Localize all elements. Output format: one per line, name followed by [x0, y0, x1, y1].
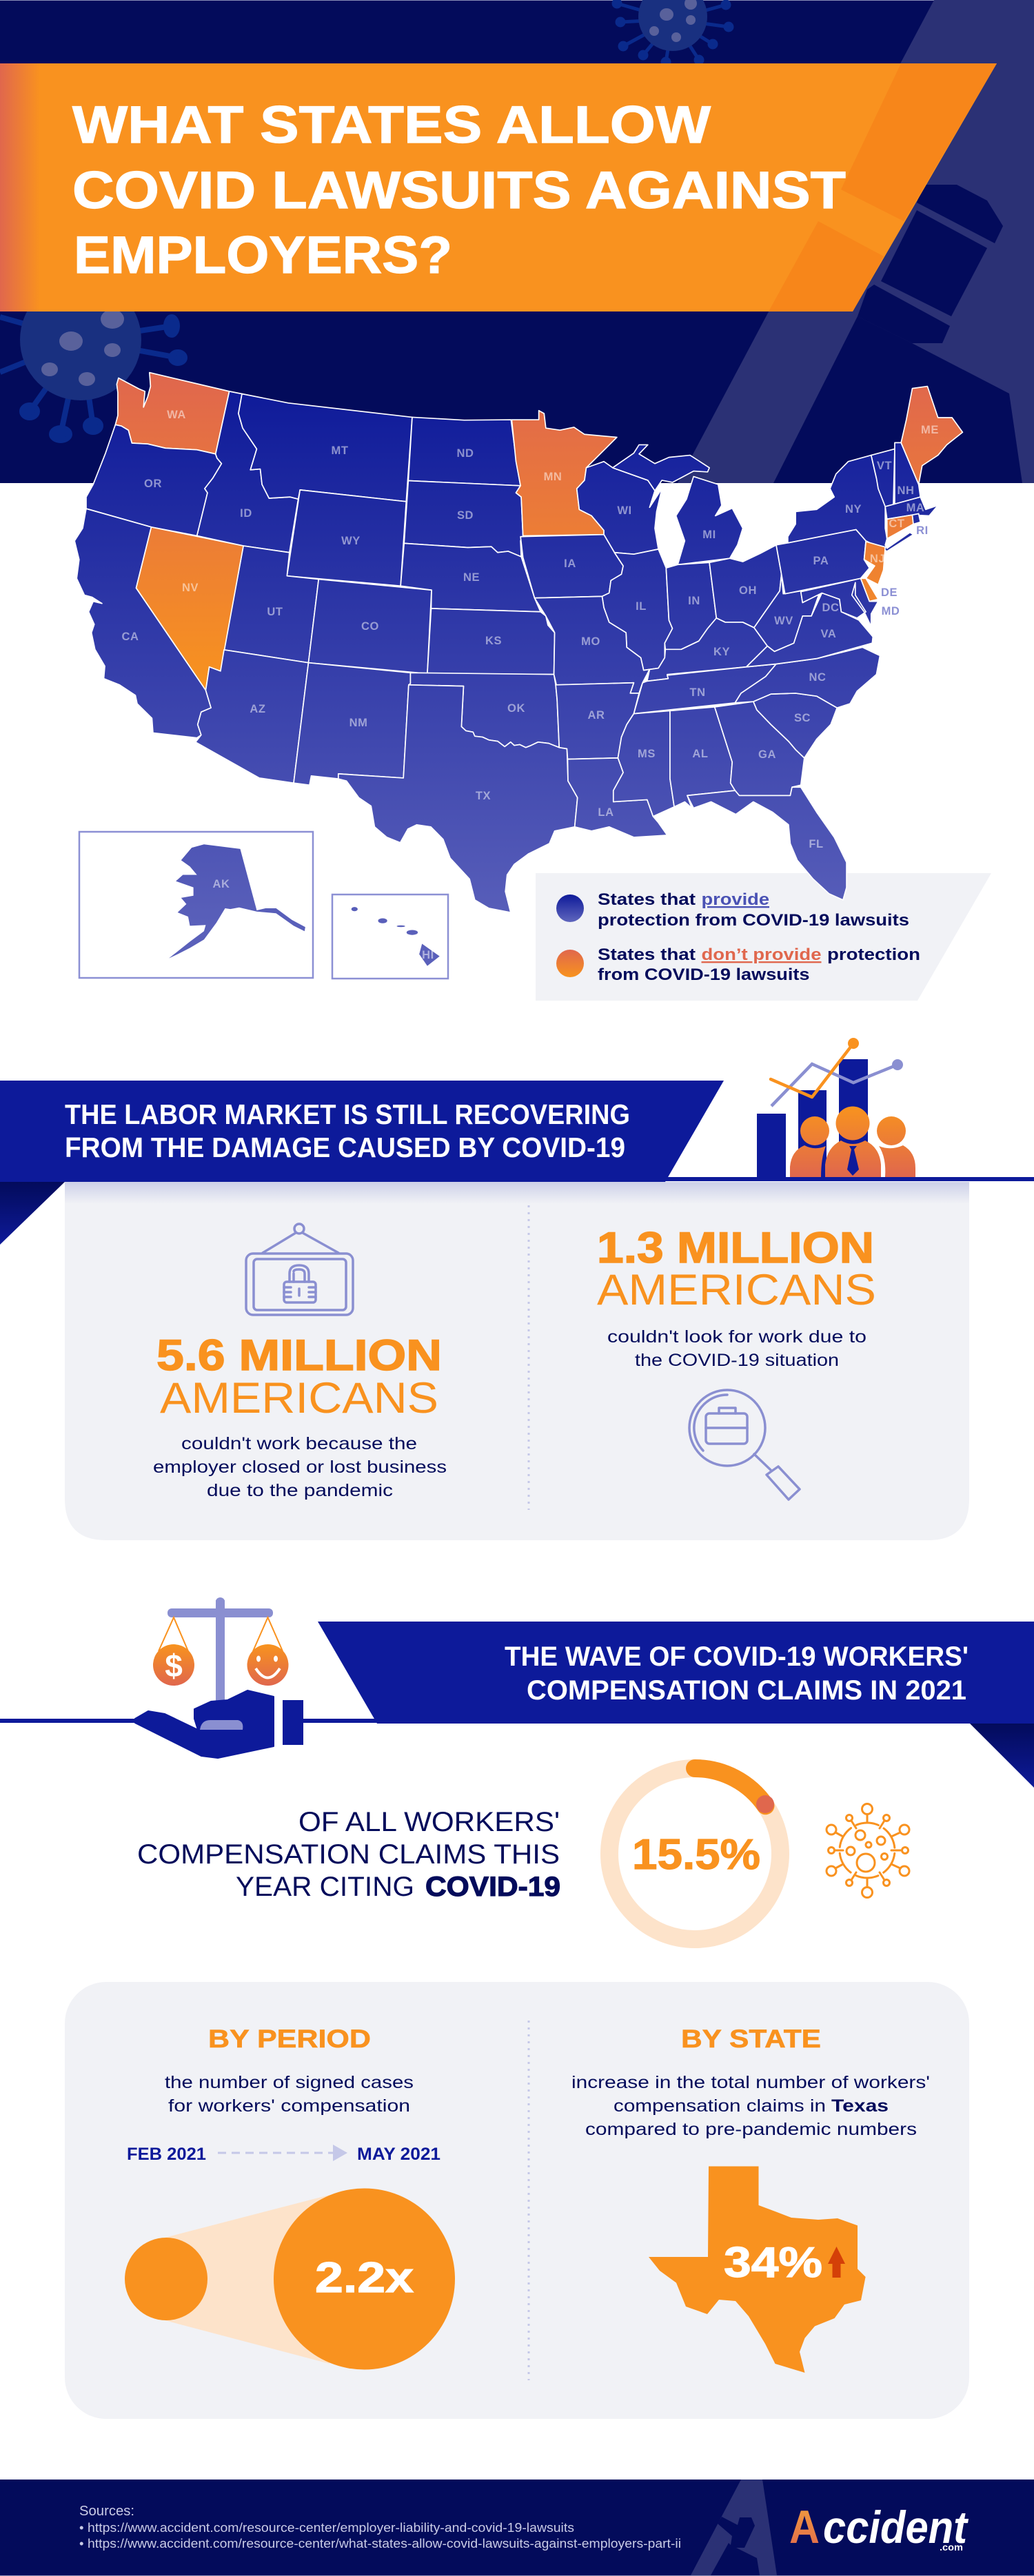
NE	[401, 543, 540, 612]
OK	[409, 673, 559, 748]
state labels: IA	[564, 558, 576, 570]
map: Texas 34%: 34%	[724, 2239, 822, 2287]
text: increase in Texas: compensation claims in	[614, 2096, 826, 2116]
state labels: NC	[809, 671, 827, 684]
UT	[224, 546, 318, 663]
section banner: compensation claims	[0, 1622, 1034, 1724]
RI	[912, 513, 920, 524]
logo: A	[789, 2501, 820, 2553]
state labels: LA	[598, 806, 614, 819]
chart: 2.2x circles	[125, 2189, 455, 2369]
text: couldn't look: the COVID-19 situation	[635, 1351, 839, 1370]
icon: closed sign with lock	[246, 1224, 353, 1315]
legend	[556, 890, 920, 984]
text: signed cases: the number of signed cases	[165, 2073, 414, 2092]
IN	[665, 562, 716, 649]
state labels: CA	[121, 631, 139, 643]
text: of all workers' claims: COMPENSATION CLAIMS THIS	[137, 1839, 560, 1870]
state labels: AZ	[250, 703, 266, 715]
MO	[535, 596, 649, 693]
state labels: WY	[341, 535, 361, 547]
WY	[287, 490, 406, 586]
AK	[169, 844, 305, 959]
section heading: labor market	[65, 1098, 630, 1163]
NH	[895, 442, 920, 504]
icon: scale held by hand	[135, 1597, 303, 1758]
MD	[801, 578, 878, 626]
GA	[715, 702, 804, 795]
state labels	[121, 409, 939, 961]
state labels: VA	[821, 628, 836, 640]
state labels: MN	[544, 471, 562, 483]
MI lower	[676, 476, 743, 564]
icon: growth chart with people	[757, 1038, 915, 1181]
state labels: TX	[476, 790, 491, 802]
title: EMPLOYERS?	[74, 226, 452, 285]
WI	[577, 462, 662, 554]
state labels: WV	[774, 615, 793, 627]
state labels: NE	[463, 571, 480, 584]
WV	[754, 574, 820, 651]
text: of all workers' claims	[137, 1807, 560, 1902]
legend text: from COVID-19 lawsuits	[598, 965, 809, 984]
state labels: MT	[331, 444, 349, 457]
footer	[0, 2480, 1034, 2576]
legend text: States that	[598, 890, 696, 909]
title: WHAT STATES ALLOW	[72, 96, 711, 154]
MS	[614, 711, 674, 817]
state labels: OR	[144, 478, 162, 490]
text: increase in Texas	[571, 2073, 930, 2139]
icon: virus top	[614, 0, 732, 65]
text: increase in Texas: compared to pre-pandemic numbers	[585, 2120, 917, 2139]
heading: by period: BY PERIOD	[208, 2025, 371, 2053]
ID	[197, 391, 298, 553]
stat: 5.6 million: AMERICANS	[160, 1374, 438, 1422]
legend text: provide	[702, 890, 769, 909]
text: of all workers' claims: YEAR CITING	[236, 1872, 414, 1902]
state labels: PA	[813, 555, 829, 567]
text: couldn't look	[607, 1327, 866, 1370]
section corner triangle left	[0, 1182, 65, 1245]
section heading: compensation claims: COMPENSATION CLAIMS IN 2021	[527, 1675, 966, 1706]
state labels: NH	[897, 484, 915, 497]
stat: 5.6 million: 5.6 MILLION	[156, 1331, 442, 1380]
stat: 5.6 million	[156, 1331, 442, 1422]
timeline: Feb 2021 to May 2021: FEB 2021	[127, 2145, 206, 2164]
icon: virus left	[0, 279, 185, 440]
MA	[885, 497, 938, 519]
state labels: GA	[758, 748, 776, 761]
stat: 1.3 million	[597, 1224, 876, 1314]
text: signed cases	[165, 2073, 414, 2116]
state labels: HI	[422, 949, 434, 961]
text: couldn't work	[153, 1434, 447, 1500]
state labels: NM	[349, 717, 367, 729]
state labels: MS	[638, 748, 656, 760]
panel: labor market stats	[65, 1182, 969, 1540]
SC	[753, 693, 837, 758]
AR	[556, 683, 639, 759]
LA	[567, 758, 667, 837]
state labels: SD	[457, 509, 474, 522]
ND	[408, 417, 520, 486]
sources: https://www.accident.com/resource-center/what-states-allow-covid-lawsuits-against-employers-part-ii	[88, 2536, 681, 2551]
title	[72, 96, 846, 285]
timeline: Feb 2021 to May 2021: MAY 2021	[357, 2145, 440, 2164]
CO	[308, 580, 432, 673]
state labels: CT	[889, 518, 905, 530]
text: increase in Texas: increase in the total number of workers'	[571, 2073, 930, 2092]
state labels: OH	[739, 584, 757, 597]
text: couldn't work: due to the pandemic	[207, 1481, 393, 1500]
icon: magnifier with briefcase	[689, 1390, 800, 1500]
state labels: MO	[581, 635, 600, 648]
map: eastern states	[511, 387, 962, 900]
legend dot: do not provide	[556, 950, 584, 977]
text: couldn't look: couldn't look for work due to	[607, 1327, 866, 1347]
legend text: don’t provide	[702, 945, 822, 964]
text: signed cases: for workers' compensation	[168, 2096, 410, 2116]
state labels: AL	[692, 748, 709, 760]
state labels: KY	[713, 646, 730, 658]
state labels: ID	[240, 507, 252, 520]
NC	[735, 647, 880, 708]
Hawaii inset box	[332, 895, 448, 979]
sources: •	[79, 2536, 83, 2551]
arrow: up	[828, 2247, 845, 2278]
NJ	[864, 542, 885, 584]
KY	[647, 618, 767, 681]
state labels: OK	[507, 702, 525, 715]
CT	[887, 515, 913, 539]
NY	[788, 456, 913, 551]
state labels outside the map: MD	[882, 605, 900, 617]
state labels: NJ	[870, 553, 885, 565]
state labels: WI	[617, 504, 632, 517]
section heading: compensation claims: THE WAVE OF COVID-19 WORKERS'	[505, 1642, 969, 1672]
IA	[520, 535, 623, 598]
state labels: KS	[485, 635, 502, 647]
state labels: NV	[182, 582, 199, 594]
state labels: NY	[845, 503, 862, 515]
state labels: TN	[689, 686, 706, 699]
legend dot: provide	[556, 895, 584, 922]
state labels: ND	[456, 447, 474, 460]
AZ	[196, 650, 308, 783]
logo: ccident	[823, 2502, 969, 2553]
IL	[602, 549, 673, 671]
text: increase in Texas: Texas	[831, 2096, 889, 2116]
text: couldn't work: employer closed or lost business	[153, 1458, 447, 1477]
OH	[709, 545, 782, 628]
state labels: AK	[212, 878, 230, 890]
state labels: UT	[267, 606, 283, 618]
logo: .com	[940, 2542, 963, 2553]
state labels: IL	[636, 600, 647, 613]
legend text: protection from COVID-19 lawsuits	[598, 911, 909, 930]
state labels: WA	[167, 409, 186, 421]
icon: scale held by hand: $	[165, 1648, 183, 1684]
state labels: VT	[877, 460, 892, 472]
PA	[776, 529, 869, 594]
sources: https://www.accident.com/resource-center/employer-liability-and-covid-19-lawsuits	[88, 2520, 574, 2535]
text: couldn't work: couldn't work because the	[181, 1434, 417, 1453]
sources: Sources:	[79, 2504, 134, 2519]
text: of all workers' claims: OF ALL WORKERS'	[298, 1807, 560, 1837]
NM	[294, 663, 410, 785]
OR	[86, 425, 221, 536]
ME	[901, 387, 962, 484]
state labels: IN	[688, 595, 700, 607]
state labels outside the map: DE	[881, 586, 898, 599]
state labels: AR	[587, 709, 605, 722]
title: COVID LAWSUITS AGAINST	[72, 161, 846, 220]
header background	[0, 0, 1034, 483]
state labels: ME	[921, 424, 939, 436]
map: western states	[74, 373, 578, 912]
MN	[511, 411, 617, 536]
state labels outside the map: RI	[916, 524, 929, 537]
NV	[136, 527, 243, 691]
section heading: labor market: FROM THE DAMAGE CAUSED BY COVID-19	[65, 1132, 625, 1163]
MT	[239, 393, 412, 502]
legend text: States that	[598, 945, 696, 964]
state labels: SC	[794, 712, 811, 724]
VT	[871, 449, 895, 507]
state labels: MA	[906, 502, 924, 514]
legend background	[536, 873, 991, 1001]
Alaska inset box	[79, 832, 313, 978]
chart: 2.2x circles: 2.2x	[315, 2254, 414, 2302]
icon: virus outline	[827, 1804, 909, 1898]
SD	[404, 481, 523, 558]
KS	[427, 609, 555, 675]
DE	[860, 578, 878, 602]
state labels: DC	[822, 602, 840, 614]
donut chart: 15.5%: 15.5%	[632, 1831, 760, 1879]
panel: by period and by state	[65, 1982, 969, 2419]
state labels: FL	[809, 838, 824, 850]
legend text: protection	[827, 945, 920, 964]
state labels: CO	[361, 620, 379, 633]
stat: 1.3 million: AMERICANS	[597, 1266, 876, 1314]
text: of all workers' claims: COVID-19	[425, 1872, 560, 1902]
section corner triangle right	[970, 1724, 1034, 1788]
sources	[79, 2504, 681, 2551]
map: Texas 34%	[649, 2167, 866, 2373]
VA	[747, 593, 873, 667]
donut chart: 15.5%	[609, 1768, 780, 1939]
state labels outside the map	[881, 524, 929, 617]
stat: 1.3 million: 1.3 MILLION	[597, 1224, 874, 1272]
CA	[74, 509, 211, 738]
state labels: MI	[702, 529, 716, 541]
TN	[633, 664, 776, 714]
section heading: compensation claims	[505, 1642, 969, 1706]
MI upper	[613, 444, 709, 491]
TX	[338, 685, 578, 912]
timeline: Feb 2021 to May 2021	[127, 2145, 440, 2164]
sources: •	[79, 2520, 83, 2535]
title banner	[0, 63, 997, 311]
heading: by state: BY STATE	[681, 2025, 821, 2053]
AL	[670, 707, 735, 808]
HI	[352, 907, 440, 966]
FL	[687, 787, 847, 900]
section heading: labor market: THE LABOR MARKET IS STILL RECOVERING	[65, 1098, 630, 1130]
section banner: labor market	[0, 1081, 1034, 1182]
legend text	[598, 890, 920, 984]
map: Alaska and Hawaii	[169, 844, 440, 966]
WA	[115, 373, 230, 454]
